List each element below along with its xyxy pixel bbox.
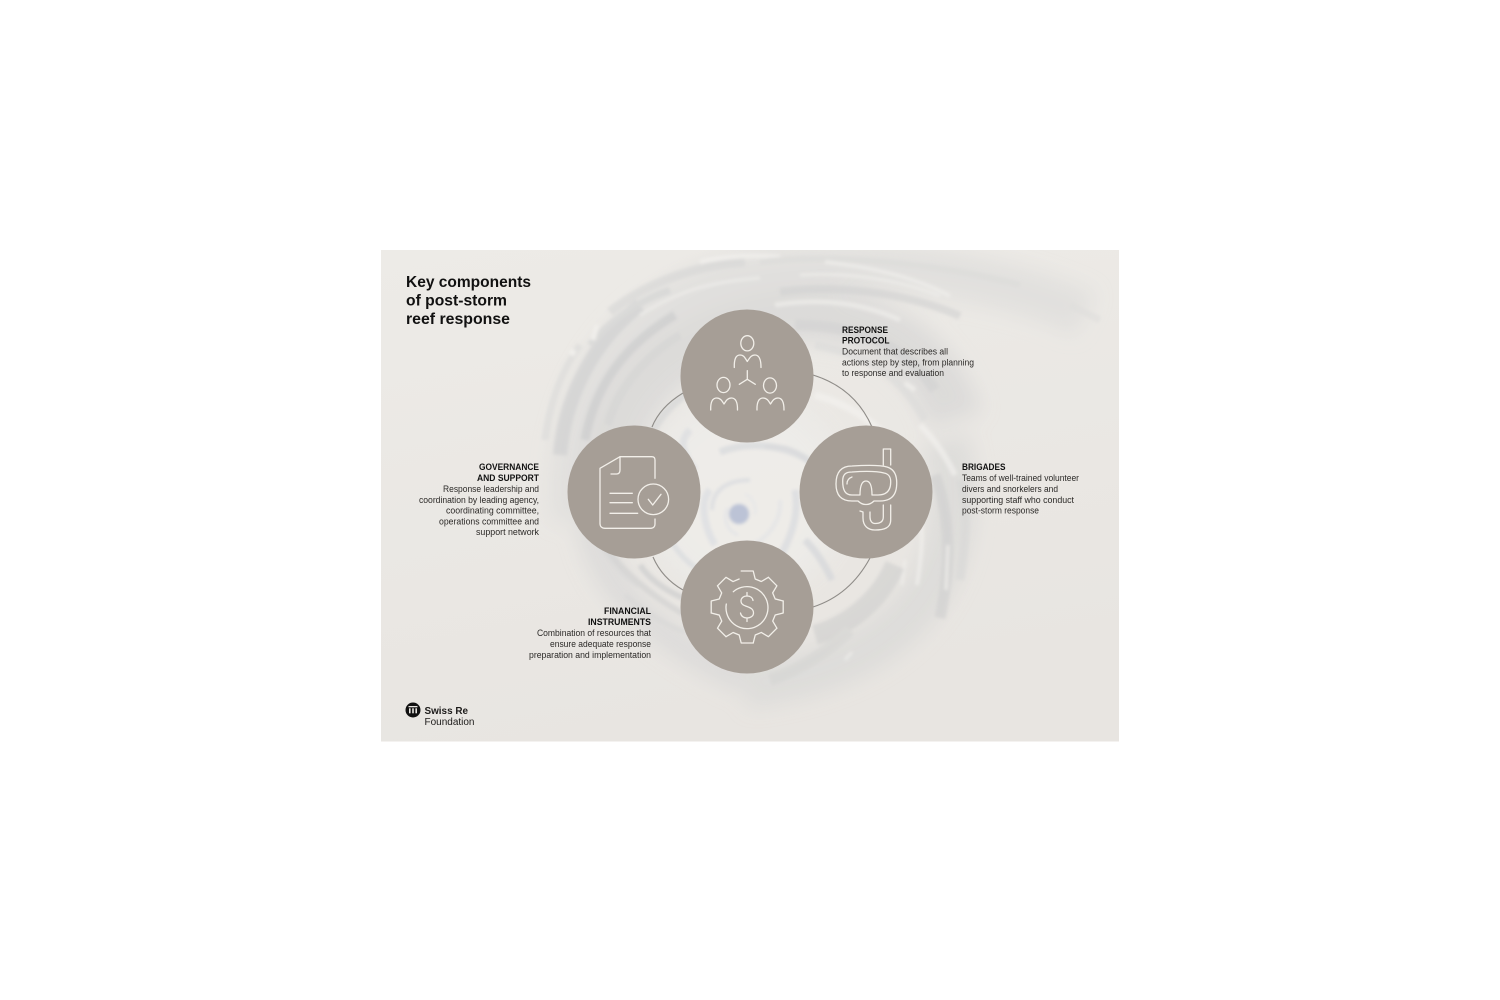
- circle: response protocol: [680, 310, 814, 442]
- text: response protocol: RESPONSE: [842, 325, 888, 335]
- logo: Swiss Re Foundation: [406, 702, 474, 728]
- text: brigades: supporting staff who conduct: [962, 495, 1074, 505]
- circle: governance: [568, 426, 700, 558]
- text: response protocol: [842, 325, 974, 378]
- icon: snorkel mask: [836, 449, 897, 530]
- panel: background: [381, 250, 1119, 742]
- icon: three people: [711, 336, 784, 410]
- text: brigades: divers and snorkelers and: [962, 484, 1058, 494]
- text: response protocol: PROTOCOL: [842, 336, 890, 346]
- panel: response protocol: [680, 310, 814, 442]
- text: financial instruments: ensure adequate response: [550, 639, 651, 649]
- logo: Swiss Re Foundation: Swiss Re: [424, 706, 468, 717]
- storm swirl background: [545, 256, 1100, 685]
- icon: logo mark: [406, 702, 420, 718]
- panel: brigades: [800, 426, 932, 558]
- text: governance and support: GOVERNANCE: [479, 462, 539, 472]
- text: governance and support: coordination by leading agency,: [419, 495, 539, 505]
- text: financial instruments: [529, 606, 651, 660]
- text: governance and support: support network: [476, 527, 539, 537]
- text: response protocol: to response and evaluation: [842, 368, 944, 378]
- text: response protocol: actions step by step, from planning: [842, 358, 974, 368]
- text: financial instruments: FINANCIAL: [604, 606, 651, 616]
- panel: governance and support: [568, 426, 700, 558]
- icon: document with check: [600, 457, 669, 528]
- panel: financial instruments: [680, 540, 814, 674]
- text: brigades: [962, 462, 1079, 516]
- text: brigades: Teams of well-trained volunteer: [962, 473, 1079, 483]
- text: governance and support: [419, 462, 539, 537]
- title: Key components: [406, 274, 531, 291]
- text: response protocol: Document that describes all: [842, 346, 948, 356]
- text: governance and support: Response leadership and: [443, 484, 539, 494]
- text: financial instruments: preparation and implementation: [529, 650, 651, 660]
- text: brigades: post-storm response: [962, 506, 1039, 516]
- logo: Swiss Re Foundation: Foundation: [424, 717, 474, 728]
- connecting ring: [652, 375, 872, 607]
- title: reef response: [406, 311, 510, 328]
- text: financial instruments: Combination of resources that: [537, 628, 651, 638]
- circle: financial instruments: [680, 540, 814, 674]
- text: governance and support: AND SUPPORT: [477, 473, 539, 483]
- circle: brigades: [800, 426, 932, 558]
- text: financial instruments: INSTRUMENTS: [588, 617, 651, 627]
- text: brigades: BRIGADES: [962, 462, 1006, 472]
- text: governance and support: operations committee and: [439, 516, 539, 526]
- text: governance and support: coordinating committee,: [446, 506, 539, 516]
- icon: gear with dollar: [707, 571, 788, 647]
- title: [406, 274, 531, 328]
- title: of post-storm: [406, 292, 507, 310]
